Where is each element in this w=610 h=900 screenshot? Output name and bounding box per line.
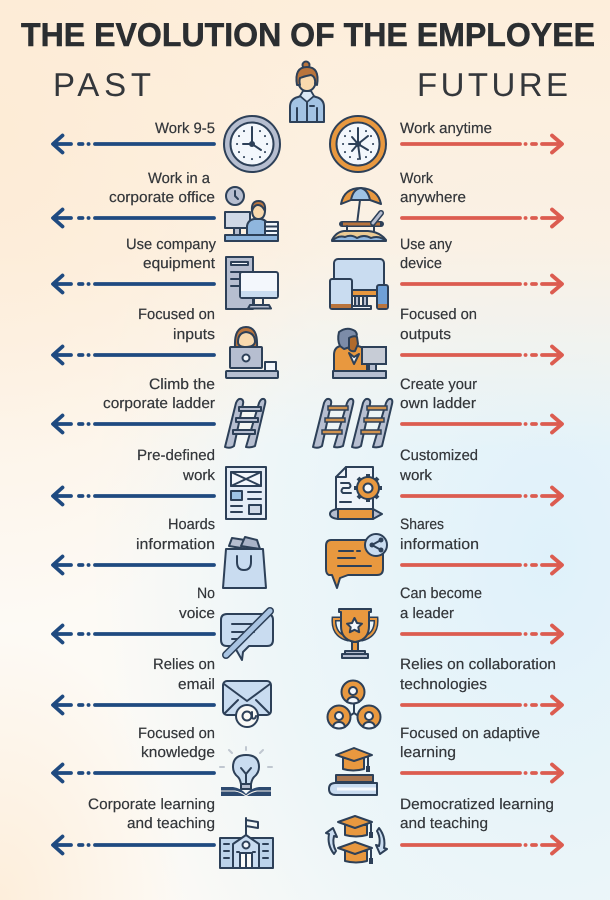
labels: future: Work	[400, 170, 433, 187]
labels: past: inputs	[173, 326, 215, 343]
labels: past: knowledge	[141, 744, 215, 761]
panel: future column	[313, 116, 562, 864]
labels: future: outputs	[400, 326, 451, 343]
labels: past: Climb the	[149, 376, 215, 393]
labels: past: corporate office	[109, 189, 215, 206]
title: THE EVOLUTION OF THE EMPLOYEE	[21, 16, 595, 53]
labels: past: Focused on	[138, 306, 215, 323]
labels: past: Corporate learning	[88, 796, 215, 813]
icon: collaboration network	[328, 680, 380, 728]
labels: future: Democratized learning	[400, 796, 554, 813]
labels: future: work	[399, 467, 433, 484]
icon: school building	[220, 818, 273, 868]
labels: future: a leader	[400, 605, 454, 622]
labels: past: Focused on	[138, 725, 215, 742]
labels: past: corporate ladder	[103, 395, 215, 412]
icon: headset worker	[333, 329, 386, 378]
labels: future	[399, 120, 556, 832]
icon: office worker	[225, 187, 278, 241]
labels: past: Hoards	[168, 516, 215, 533]
heading: future: FUTURE	[417, 66, 568, 103]
labels: future: Focused on adaptive	[400, 725, 540, 742]
labels: future: Focused on	[400, 306, 477, 323]
labels: past: voice	[179, 605, 215, 622]
labels: past: equipment	[143, 255, 216, 272]
labels: future: Create your	[400, 376, 477, 393]
labels: past: No	[197, 585, 215, 602]
labels: future: own ladder	[400, 395, 476, 412]
labels: past: Work 9-5	[155, 120, 215, 137]
labels: past: email	[178, 676, 215, 693]
labels: past: information	[136, 536, 215, 553]
icon: beach umbrella	[332, 188, 386, 241]
icon: email	[223, 681, 271, 727]
icon: ladder	[225, 399, 265, 448]
labels: future: device	[400, 255, 442, 272]
icon: light bulb and book	[220, 747, 272, 796]
labels: past: Pre-defined	[137, 447, 215, 464]
labels: future: Can become	[400, 585, 482, 602]
icon: multiple devices	[330, 259, 388, 309]
icon: laptop worker	[226, 327, 278, 378]
labels: past: Relies on	[153, 656, 215, 673]
labels: future: Use any	[400, 236, 452, 253]
labels: future: technologies	[400, 676, 487, 693]
labels: future: Relies on collaboration	[400, 656, 556, 673]
arrows: future	[402, 136, 562, 854]
icon: custom document with gear	[330, 467, 382, 519]
icon: employee	[290, 62, 324, 122]
panel: past column	[53, 116, 280, 868]
icon: sharing speech bubble	[326, 534, 387, 588]
labels: past	[88, 120, 216, 832]
icon: two ladders	[313, 399, 392, 448]
labels: past: Use company	[126, 236, 216, 253]
labels: future: anywhere	[400, 189, 466, 206]
labels: future: and teaching	[400, 815, 488, 832]
icon: trophy	[334, 609, 376, 658]
icon: no voice speech bubbles	[221, 611, 273, 660]
labels: future: Customized	[400, 447, 478, 464]
icon: computer tower	[226, 257, 278, 309]
labels: future: learning	[400, 744, 456, 761]
labels: past: and teaching	[127, 815, 215, 832]
icon: graduation cap on books	[329, 748, 377, 795]
icon: cycling graduation caps	[326, 816, 387, 864]
labels: future: Work anytime	[400, 120, 492, 137]
heading: past: PAST	[53, 66, 151, 103]
icon: wall clock	[224, 116, 280, 172]
labels: future: information	[400, 536, 479, 553]
labels: past: Work in a	[148, 170, 211, 187]
labels: past: work	[182, 467, 216, 484]
arrows: past	[53, 136, 214, 854]
labels: future: Shares	[400, 516, 444, 533]
icon: flexible clock	[330, 116, 386, 172]
icon: shopping bag	[223, 537, 266, 588]
icon: pre-defined document	[226, 467, 266, 519]
